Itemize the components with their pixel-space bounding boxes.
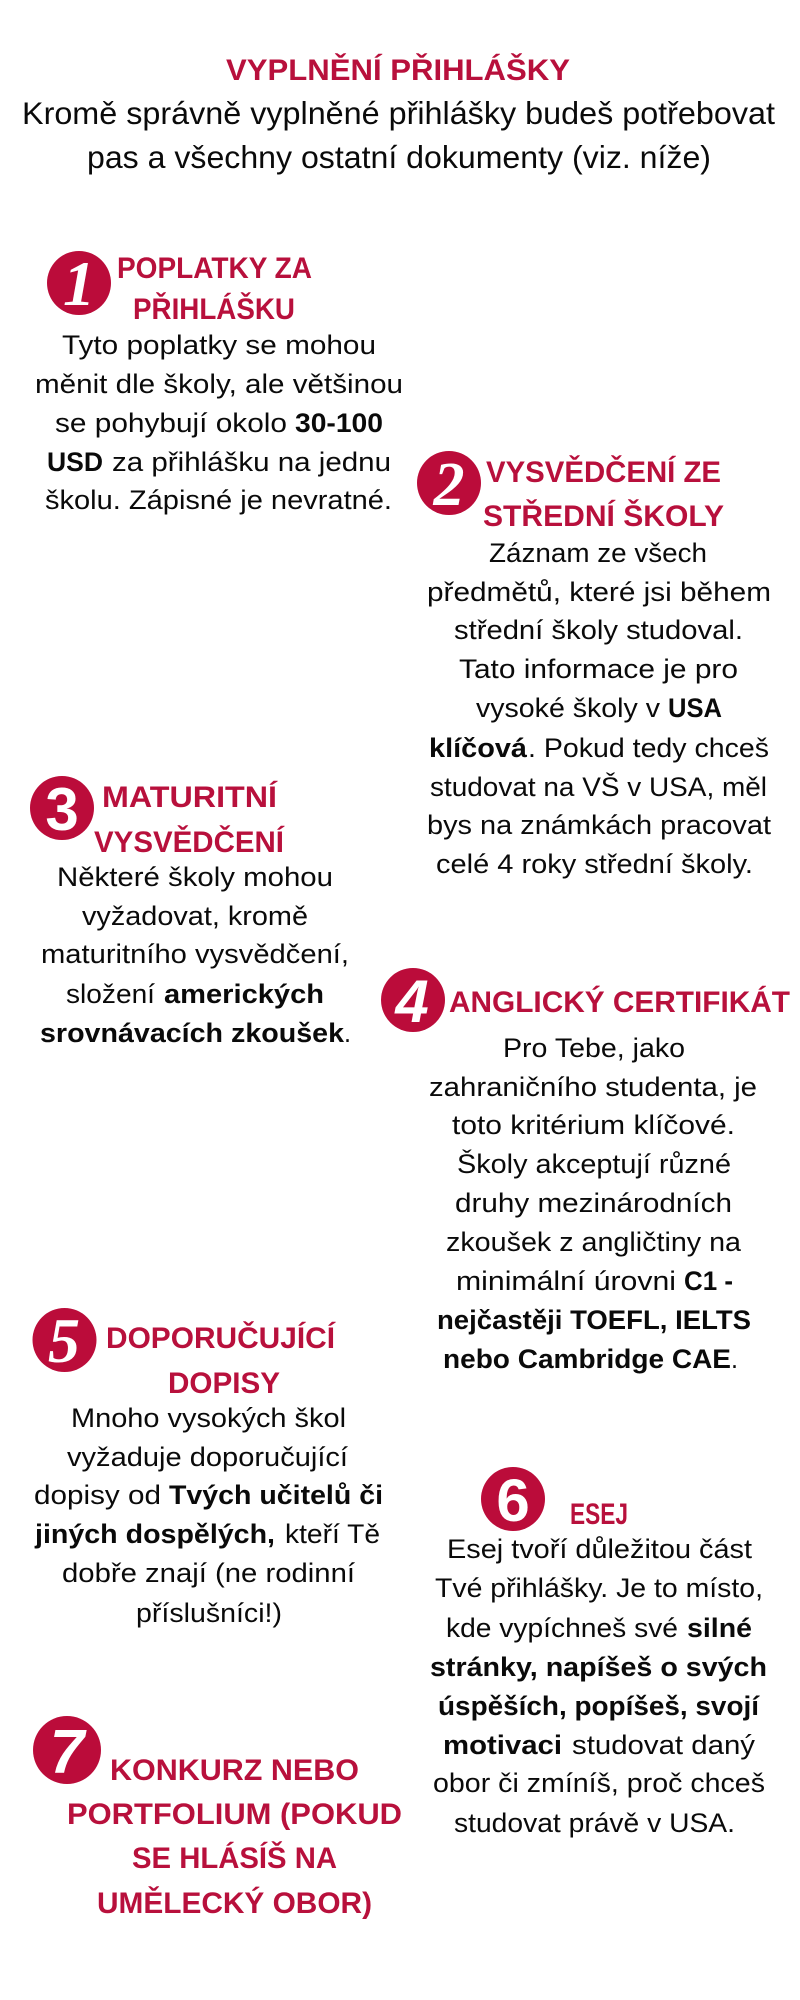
icon: number 5: 5 bbox=[48, 1305, 80, 1376]
text block: dopisy: dopisy od bbox=[34, 1480, 161, 1510]
title block bbox=[22, 53, 775, 175]
text block: dopisy: vyžaduje doporučující bbox=[67, 1442, 349, 1472]
text block: vysvědčení: předmětů, které jsi během bbox=[427, 577, 771, 607]
text block: vysvědčení: Záznam ze všech bbox=[489, 538, 707, 568]
icon: number 1: 1 bbox=[63, 248, 95, 319]
panel: 6 esej bbox=[430, 1467, 767, 1838]
heading: maturitní vysvědčení: MATURITNÍ bbox=[102, 780, 278, 814]
text block: maturitní: maturitního vysvědčení, bbox=[41, 939, 349, 969]
text block: dopisy: dobře znají (ne rodinní bbox=[62, 1558, 356, 1588]
text block: certifikát: toto kritérium klíčové. bbox=[452, 1110, 735, 1140]
icon: number 4 bbox=[381, 968, 445, 1035]
text block: vysvědčení: celé 4 roky střední školy. bbox=[436, 849, 753, 879]
heading: doporučující dopisy: DOPORUČUJÍCÍ bbox=[106, 1321, 336, 1355]
heading: konkurz nebo portfolium: KONKURZ NEBO bbox=[110, 1754, 359, 1787]
icon: number 6: 6 bbox=[496, 1467, 530, 1534]
panel: 5 doporučující dopisy bbox=[32, 1305, 383, 1628]
text block: certifikát: nebo Cambridge CAE bbox=[443, 1344, 731, 1374]
icon: number 6 bbox=[481, 1467, 545, 1534]
text block: certifikát: zahraničního studenta, je bbox=[429, 1072, 757, 1102]
text block: certifikát: nejčastěji TOEFL, IELTS bbox=[437, 1305, 751, 1335]
text block: vysvědčení: střední školy studoval. bbox=[454, 615, 743, 645]
heading: konkurz nebo portfolium: SE HLÁSÍŠ NA bbox=[132, 1841, 337, 1875]
text block: esej: Esej tvoří důležitou část bbox=[447, 1534, 753, 1564]
icon: number 3 bbox=[30, 776, 94, 843]
panel: 7 konkurz nebo portfolium bbox=[33, 1716, 402, 1920]
text block: vysvědčení: klíčová bbox=[429, 733, 528, 763]
icon: number 3: 3 bbox=[45, 776, 79, 843]
heading: konkurz nebo portfolium: UMĚLECKÝ OBOR) bbox=[97, 1886, 372, 1920]
text block: dopisy: Mnoho vysokých škol bbox=[71, 1403, 346, 1433]
text block: esej: úspěších, popíšeš, svojí bbox=[438, 1691, 761, 1721]
heading: vysvědčení ze střední školy: STŘEDNÍ ŠKOLY bbox=[483, 499, 724, 533]
heading: anglický certifikát: ANGLICKÝ CERTIFIKÁT bbox=[449, 985, 790, 1019]
heading: maturitní vysvědčení: VYSVĚDČENÍ bbox=[94, 825, 285, 859]
text block: maturitní: složení bbox=[66, 979, 156, 1009]
panel: 3 maturitní vysvědčení bbox=[30, 776, 351, 1048]
text block: poplatky: za přihlášku na jednu bbox=[112, 447, 391, 477]
text block: dopisy: kteří Tě bbox=[285, 1519, 380, 1549]
text block: certifikát: Pro Tebe, jako bbox=[503, 1033, 685, 1063]
text block: esej: Tvé přihlášky. Je to místo, bbox=[435, 1573, 763, 1603]
text block: esej: studovat právě v USA. bbox=[454, 1808, 735, 1838]
icon: number 7 bbox=[33, 1716, 101, 1787]
icon: number 2: 2 bbox=[432, 451, 464, 519]
icon: number 4: 4 bbox=[394, 968, 429, 1035]
text block: maturitní bbox=[40, 862, 351, 1048]
text block: maturitní: . bbox=[344, 1018, 351, 1048]
panel: 4 anglický certifikát bbox=[381, 968, 790, 1374]
heading: maturitní vysvědčení bbox=[94, 780, 285, 859]
text block: esej: kde vypíchneš své bbox=[446, 1613, 678, 1643]
text block: poplatky: 30-100 bbox=[295, 408, 383, 438]
icon: number 5 bbox=[32, 1305, 96, 1376]
subtitle: Kromě správně vyplněné přihlášky budeš potřebovat bbox=[22, 95, 775, 131]
text block: vysvědčení: USA bbox=[668, 693, 722, 723]
text block: esej: obor či zmíníš, proč chceš bbox=[433, 1768, 765, 1798]
text block: certifikát bbox=[429, 1033, 757, 1374]
icon: number 2 bbox=[417, 451, 481, 519]
text block: vysvědčení: . Pokud tedy chceš bbox=[528, 733, 769, 763]
heading: poplatky za přihlášku bbox=[117, 252, 312, 326]
heading: vysvědčení ze střední školy: VYSVĚDČENÍ ZE bbox=[486, 455, 721, 489]
text block: maturitní: Některé školy mohou bbox=[57, 862, 333, 892]
heading: poplatky za přihlášku: PŘIHLÁŠKU bbox=[133, 292, 295, 326]
text block: poplatky: školu. Zápisné je nevratné. bbox=[45, 485, 392, 515]
text block: certifikát: druhy mezinárodních bbox=[455, 1188, 732, 1218]
text block: vysvědčení bbox=[427, 538, 772, 879]
text block: certifikát: C1 - bbox=[684, 1266, 733, 1296]
text block: certifikát: Školy akceptují různé bbox=[457, 1148, 731, 1179]
panel: 2 vysvědčení ze střední školy bbox=[417, 451, 772, 879]
text block: dopisy: příslušníci!) bbox=[136, 1598, 282, 1628]
icon: number 7: 7 bbox=[50, 1718, 87, 1787]
heading: vysvědčení ze střední školy bbox=[483, 455, 724, 533]
text block: certifikát: minimální úrovni bbox=[456, 1266, 676, 1296]
text block: esej: stránky, napíšeš o svých bbox=[430, 1652, 767, 1682]
text block: esej bbox=[430, 1534, 767, 1838]
heading: doporučující dopisy bbox=[106, 1321, 336, 1400]
heading: esej: ESEJ bbox=[570, 1498, 628, 1531]
text block: maturitní: amerických bbox=[164, 979, 324, 1009]
title: VYPLNĚNÍ PŘIHLÁŠKY bbox=[226, 53, 570, 87]
text block: certifikát: zkoušek z angličtiny na bbox=[446, 1227, 742, 1257]
text block: dopisy: jiných dospělých, bbox=[34, 1519, 275, 1549]
text block: vysvědčení: Tato informace je pro bbox=[459, 654, 738, 684]
text block: vysvědčení: vysoké školy v bbox=[476, 693, 661, 723]
text block: poplatky bbox=[35, 330, 403, 515]
text block: vysvědčení: bys na známkách pracovat bbox=[427, 810, 772, 840]
subtitle bbox=[22, 95, 775, 175]
text block: esej: silné bbox=[687, 1613, 752, 1643]
subtitle: pas a všechny ostatní dokumenty (viz. níže) bbox=[87, 139, 711, 175]
text block: poplatky: Tyto poplatky se mohou bbox=[62, 330, 376, 360]
text block: maturitní: vyžadovat, kromě bbox=[82, 901, 308, 931]
text block: dopisy: Tvých učitelů či bbox=[169, 1480, 383, 1510]
heading: poplatky za přihlášku: POPLATKY ZA bbox=[117, 252, 312, 285]
text block: vysvědčení: studovat na VŠ v USA, měl bbox=[430, 771, 767, 802]
text block: esej: motivaci bbox=[443, 1730, 562, 1760]
text block: esej: studovat daný bbox=[572, 1730, 756, 1760]
icon: number 1 bbox=[47, 248, 111, 319]
heading: doporučující dopisy: DOPISY bbox=[168, 1367, 280, 1400]
heading: konkurz nebo portfolium bbox=[67, 1754, 402, 1920]
text block: poplatky: USD bbox=[47, 447, 103, 477]
text block: certifikát: . bbox=[731, 1344, 738, 1374]
text block: poplatky: měnit dle školy, ale většinou bbox=[35, 369, 403, 399]
text block: poplatky: se pohybují okolo bbox=[55, 408, 287, 438]
text block: maturitní: srovnávacích zkoušek bbox=[40, 1018, 345, 1048]
panel: 1 poplatky bbox=[35, 248, 403, 515]
text block: dopisy bbox=[34, 1403, 383, 1628]
heading: konkurz nebo portfolium: PORTFOLIUM (POKUD bbox=[67, 1798, 402, 1831]
